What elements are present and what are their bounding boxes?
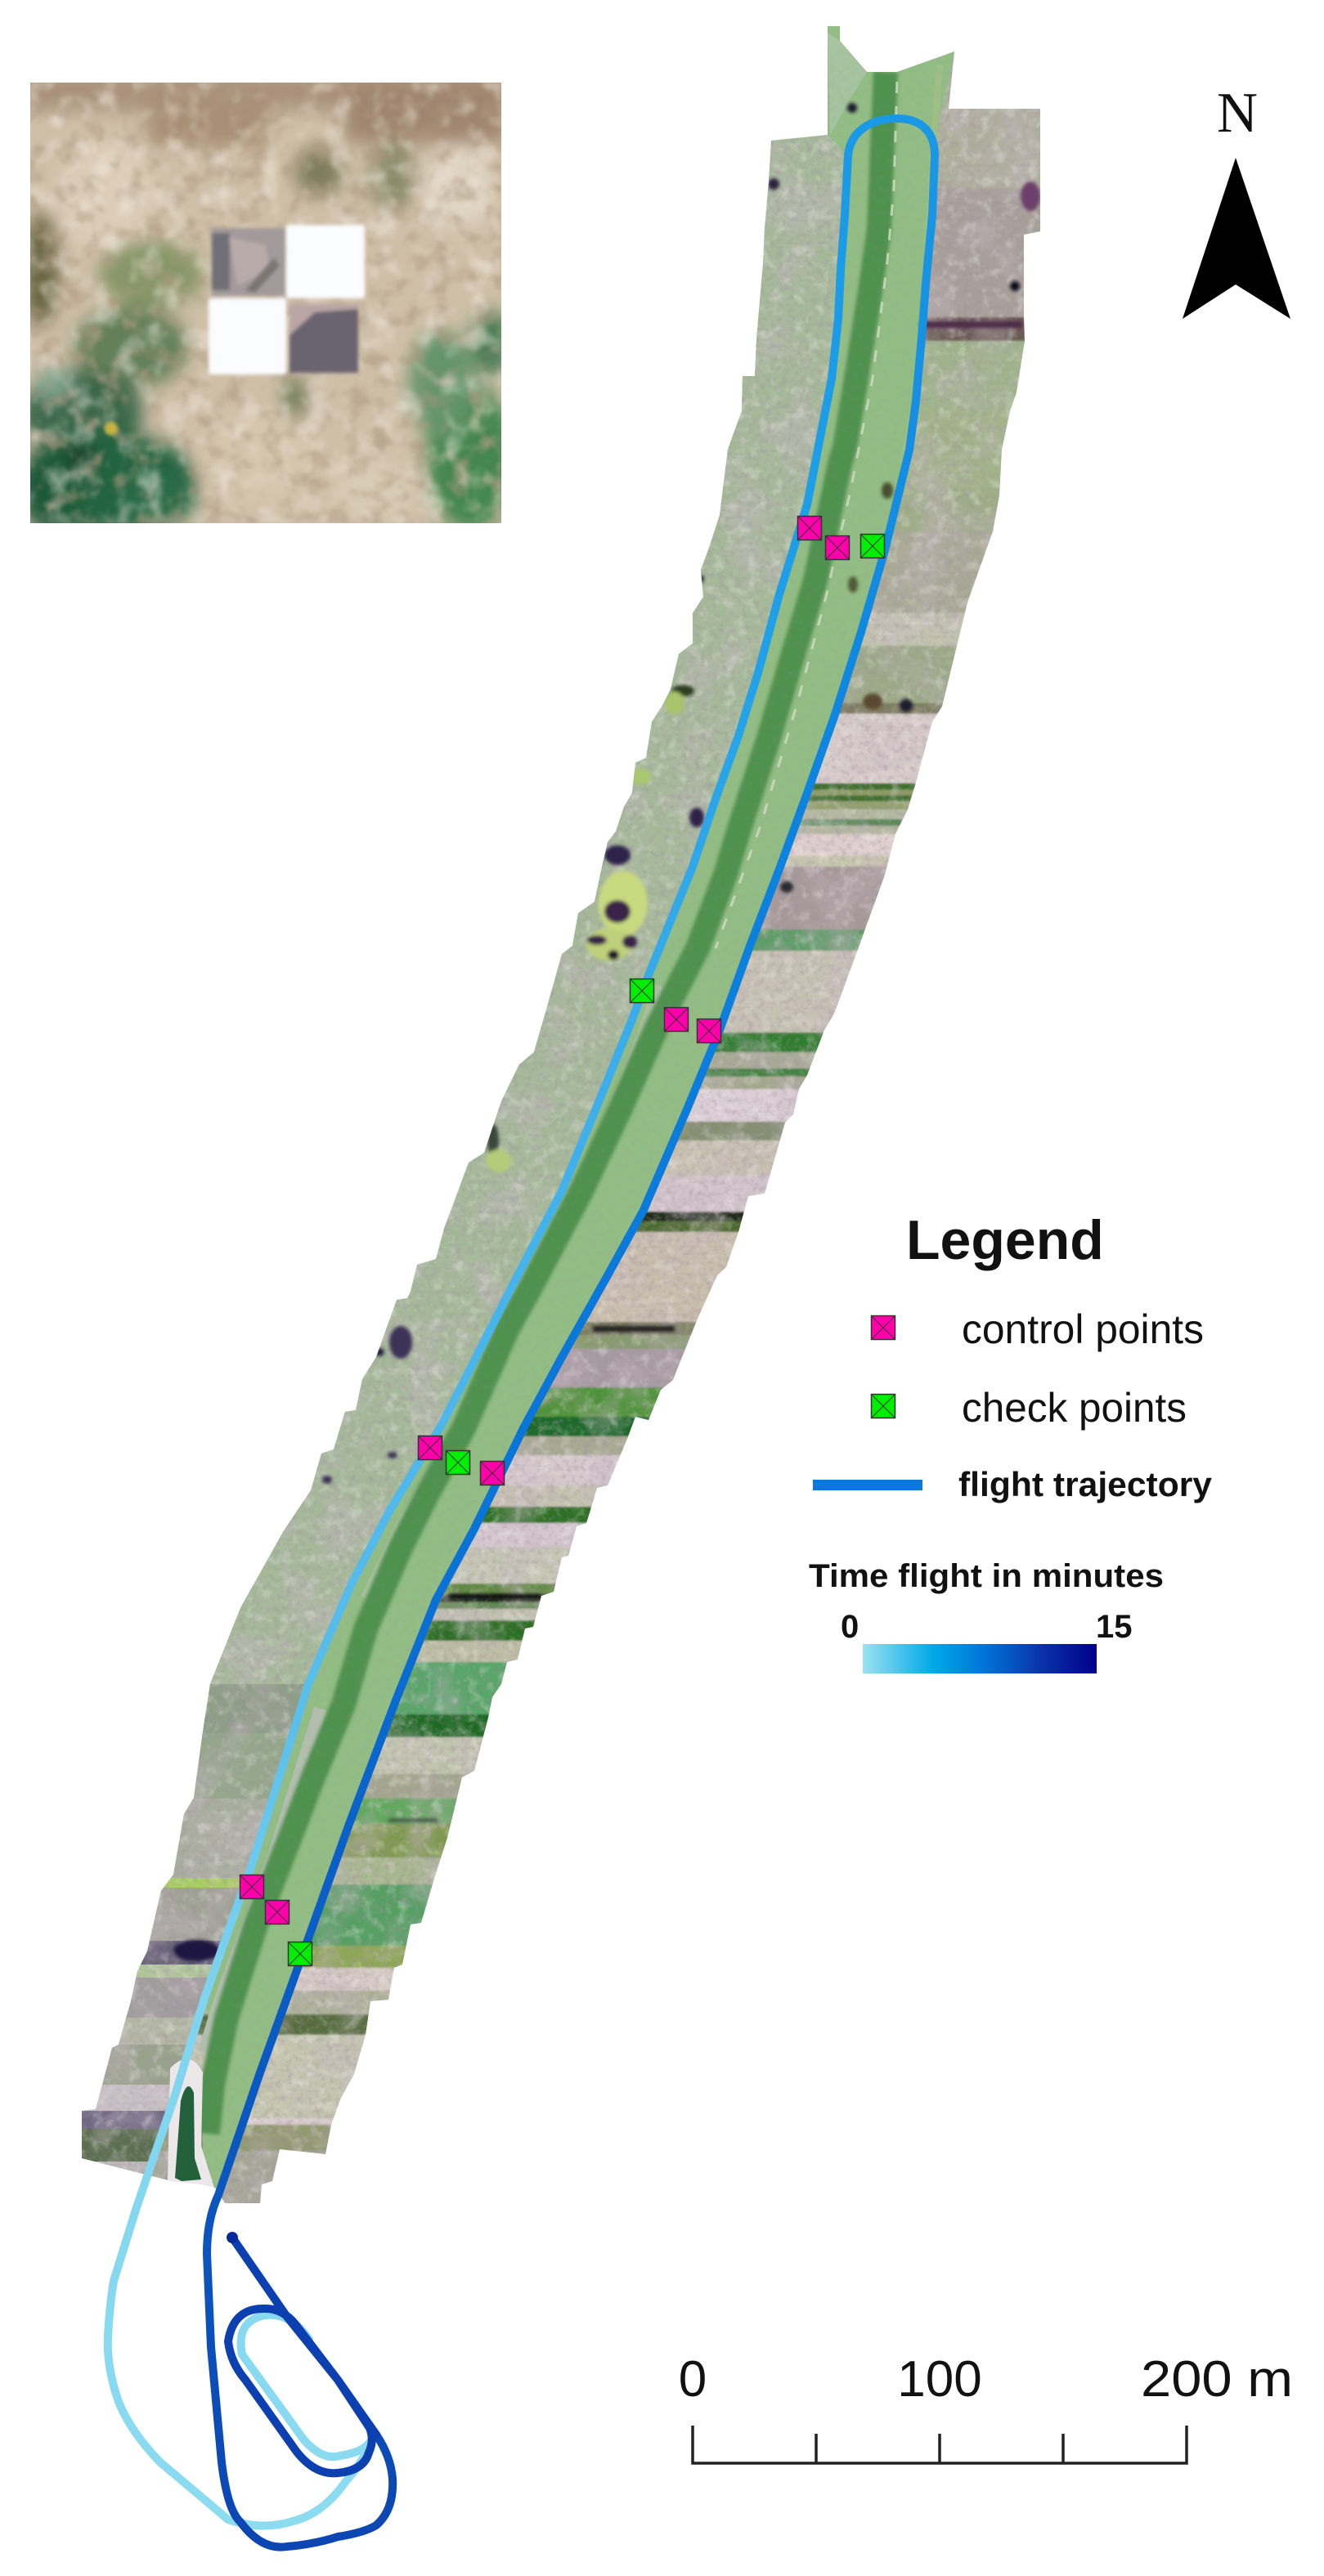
time colour ramp: 15 xyxy=(1096,1609,1132,1645)
time colour ramp: 0 xyxy=(841,1609,859,1645)
flight trajectory, final loop xyxy=(228,2238,376,2473)
north arrow: N xyxy=(1217,82,1258,145)
legend: flight trajectory xyxy=(813,1465,1213,1503)
flight start dot xyxy=(227,2232,238,2243)
ground control and check point markers xyxy=(240,517,885,1965)
crop field bands xyxy=(74,16,1055,2208)
road corridor with mown grass xyxy=(164,26,981,2207)
legend: control points: control points xyxy=(962,1306,1204,1352)
left mottled terrain xyxy=(82,41,867,2175)
legend title: Legend xyxy=(906,1209,1104,1271)
legend: check points: check points xyxy=(962,1385,1187,1431)
mottled texture over terrain xyxy=(74,16,1055,2224)
flight trajectory, early light segment xyxy=(108,119,935,2547)
time colour ramp: Time flight in minutes xyxy=(809,1558,1164,1594)
photo inset: ground control target xyxy=(16,74,515,533)
legend xyxy=(809,1209,1213,1673)
north arrow xyxy=(1183,82,1290,319)
orthomosaic strip xyxy=(41,16,1055,2224)
scale bar: 200 m xyxy=(1141,2351,1293,2408)
bottom side road xyxy=(168,2059,214,2188)
trees and dark vegetation xyxy=(173,103,1040,1961)
legend: flight trajectory: flight trajectory xyxy=(958,1465,1213,1503)
scale bar xyxy=(679,2351,1293,2463)
flight trajectory, descending segment xyxy=(207,119,935,2547)
scale bar: 100 xyxy=(897,2351,982,2408)
time colour ramp xyxy=(809,1558,1164,1673)
scale bar: 0 xyxy=(679,2351,707,2408)
